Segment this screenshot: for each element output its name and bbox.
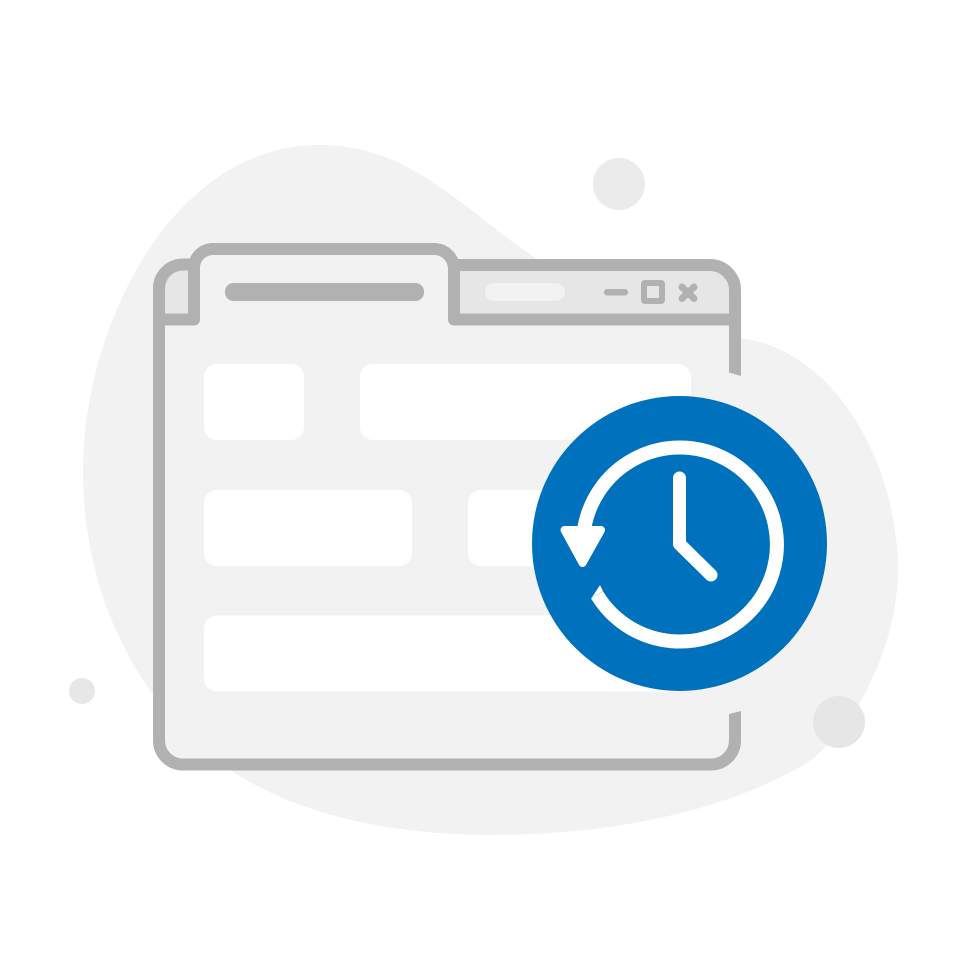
- clock hands: [680, 478, 711, 575]
- background blob: [83, 145, 898, 835]
- card 3: [204, 490, 412, 566]
- history badge: [532, 396, 827, 691]
- window outline: [159, 264, 735, 764]
- maximize button: [644, 283, 662, 301]
- decorative circle left: [69, 678, 95, 704]
- window body fill: [159, 319, 735, 764]
- circular arrow: [584, 448, 777, 642]
- card 1: [204, 364, 304, 440]
- arrow head: [564, 530, 601, 563]
- active tab: [194, 249, 454, 320]
- tab title bar: [225, 283, 424, 301]
- card 4: [468, 490, 668, 566]
- decorative circle top: [593, 158, 645, 210]
- decorative circle right: [813, 696, 865, 748]
- content cards: [204, 364, 691, 692]
- outline end top: [729, 370, 741, 376]
- address pill: [485, 283, 565, 301]
- circular arrow end cut: [591, 585, 603, 598]
- minimize button: [604, 289, 628, 296]
- card 2: [360, 364, 691, 440]
- browser window: [159, 249, 741, 764]
- blue circle: [532, 396, 827, 691]
- card 5: [204, 616, 691, 692]
- tab outline: [159, 249, 735, 320]
- outline end bottom: [729, 711, 741, 716]
- back tab corner: [159, 264, 194, 320]
- close button: [682, 287, 694, 298]
- title bar: [454, 265, 735, 320]
